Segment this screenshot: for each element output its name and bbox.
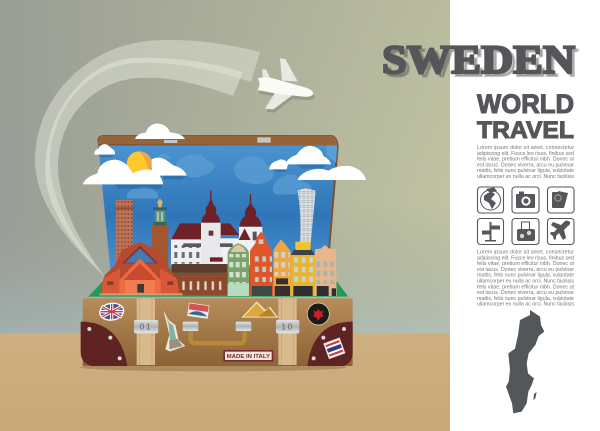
suitcase body bbox=[80, 298, 353, 371]
landmark: red brick church bbox=[99, 242, 183, 295]
background clouds bbox=[127, 153, 312, 199]
landmark: Stockholm City Hall tower bbox=[152, 198, 168, 270]
landmark: Lacko castle bbox=[171, 190, 262, 265]
text block: lower paragraph: est lacus. Donec viverra, arcu eu pulvinar bbox=[477, 267, 574, 273]
white clouds bbox=[83, 123, 366, 184]
icon: airplane bbox=[548, 218, 574, 244]
heading: SWEDEN: SWEDEN bbox=[382, 37, 575, 82]
badge: made in Italy bbox=[223, 350, 273, 362]
text block: intro paragraph: mattis, felis nunc pulvinar ligula, vulputate bbox=[477, 168, 574, 174]
text block: lower paragraph: ullamcorper ex nulla ac orci. Nunc facilisis bbox=[477, 302, 574, 308]
icon: signpost bbox=[478, 218, 504, 244]
text block: intro paragraph: Lorem ipsum dolor sit amet, consectetur bbox=[477, 145, 574, 151]
badge: made in Italy: MADE IN ITALY bbox=[227, 354, 270, 360]
icon: passport bbox=[548, 187, 574, 213]
landmark: red townhouse bbox=[250, 232, 273, 296]
text block: lower paragraph bbox=[477, 250, 575, 308]
text block: lower paragraph: mattis, felis nunc pulvinar ligula, vulputate bbox=[477, 296, 574, 302]
airplane shadow bbox=[259, 81, 315, 113]
lid top band bbox=[98, 136, 338, 145]
airplane fuselage bbox=[257, 77, 313, 97]
icon: globe bbox=[478, 187, 504, 213]
right strap bbox=[278, 298, 297, 365]
heading: WORLD: WORLD bbox=[477, 89, 574, 119]
airplane bbox=[257, 58, 315, 113]
sticker: Thai flag bbox=[323, 338, 345, 359]
airplane wings and tail bbox=[262, 58, 298, 109]
floor shadow bbox=[80, 363, 347, 371]
landmark: peach townhouse bbox=[315, 245, 337, 296]
landmark: water tower bbox=[115, 200, 134, 265]
green ground bbox=[88, 268, 348, 297]
icon: luggage bbox=[512, 218, 539, 244]
sticker: pyramids bbox=[241, 301, 278, 318]
landmark: orange townhouse bbox=[273, 239, 291, 296]
text block: lower paragraph: felis vitae, pretium efficitur nibh. Donec ut bbox=[477, 284, 575, 290]
left corner guard bbox=[81, 322, 127, 366]
landmark: Turning Torso bbox=[298, 188, 316, 243]
map of Sweden bbox=[506, 310, 544, 413]
background wall bbox=[0, 0, 450, 334]
lid rim bbox=[97, 135, 339, 270]
text block: intro paragraph: felis vitae, pretium efficitur nibh. Donec ut bbox=[477, 157, 575, 163]
text block: lower paragraph: adipiscing elit. Fusce leo risus, finibus sed bbox=[477, 255, 574, 261]
text block: intro paragraph: adipiscing elit. Fusce leo risus, finibus sed bbox=[477, 151, 574, 157]
left strap bbox=[137, 298, 155, 365]
sticker: rising sun bbox=[187, 303, 209, 319]
sticker: maple leaf bbox=[307, 303, 329, 325]
combination lock 01: 01 bbox=[140, 321, 152, 331]
text block: lower paragraph: ullamcorper ex nulla ac orci. Nunc facilisis bbox=[477, 278, 574, 284]
text block: lower paragraph: Lorem ipsum dolor sit amet, consectetur bbox=[477, 250, 574, 256]
sticker: Statue of Liberty bbox=[163, 311, 185, 351]
white side panel bbox=[450, 0, 600, 431]
heading: SWEDEN shadow: SWEDEN bbox=[386, 40, 578, 85]
landmark: green townhouse bbox=[228, 243, 249, 296]
cloud shadows bbox=[98, 155, 327, 189]
handle bbox=[183, 322, 251, 343]
icon: camera bbox=[512, 187, 539, 213]
combination lock 01 bbox=[134, 320, 158, 333]
combination lock 10: 10 bbox=[281, 321, 294, 331]
lid interior sky bbox=[98, 145, 337, 273]
text block: lower paragraph: est lacus. Donec viverra, arcu eu pulvinar bbox=[477, 290, 574, 296]
heading: TRAVEL: TRAVEL bbox=[477, 117, 574, 144]
right corner guard bbox=[307, 322, 353, 366]
sticker: UK flag bbox=[98, 301, 125, 322]
sun bbox=[127, 151, 152, 177]
inner side strip bbox=[326, 145, 337, 163]
text block: intro paragraph: ullamcorper ex nulla ac orci. Nunc facilisis bbox=[477, 174, 574, 180]
airplane contrail bbox=[35, 40, 260, 277]
landmark: brick building bbox=[172, 264, 228, 295]
landmark: yellow townhouse bbox=[291, 242, 315, 296]
floor bbox=[0, 333, 450, 431]
text block: lower paragraph: mattis, felis nunc pulvinar ligula, vulputate bbox=[477, 273, 574, 279]
text block: lower paragraph: felis vitae, pretium efficitur nibh. Donec ut bbox=[477, 261, 575, 267]
open suitcase lid bbox=[83, 123, 366, 297]
lid latches bbox=[164, 137, 271, 143]
combination lock 10 bbox=[276, 320, 299, 333]
body case bbox=[83, 298, 353, 366]
text block: intro paragraph bbox=[477, 145, 575, 180]
text block: intro paragraph: est lacus. Donec viverra, arcu eu pulvinar bbox=[477, 162, 574, 168]
